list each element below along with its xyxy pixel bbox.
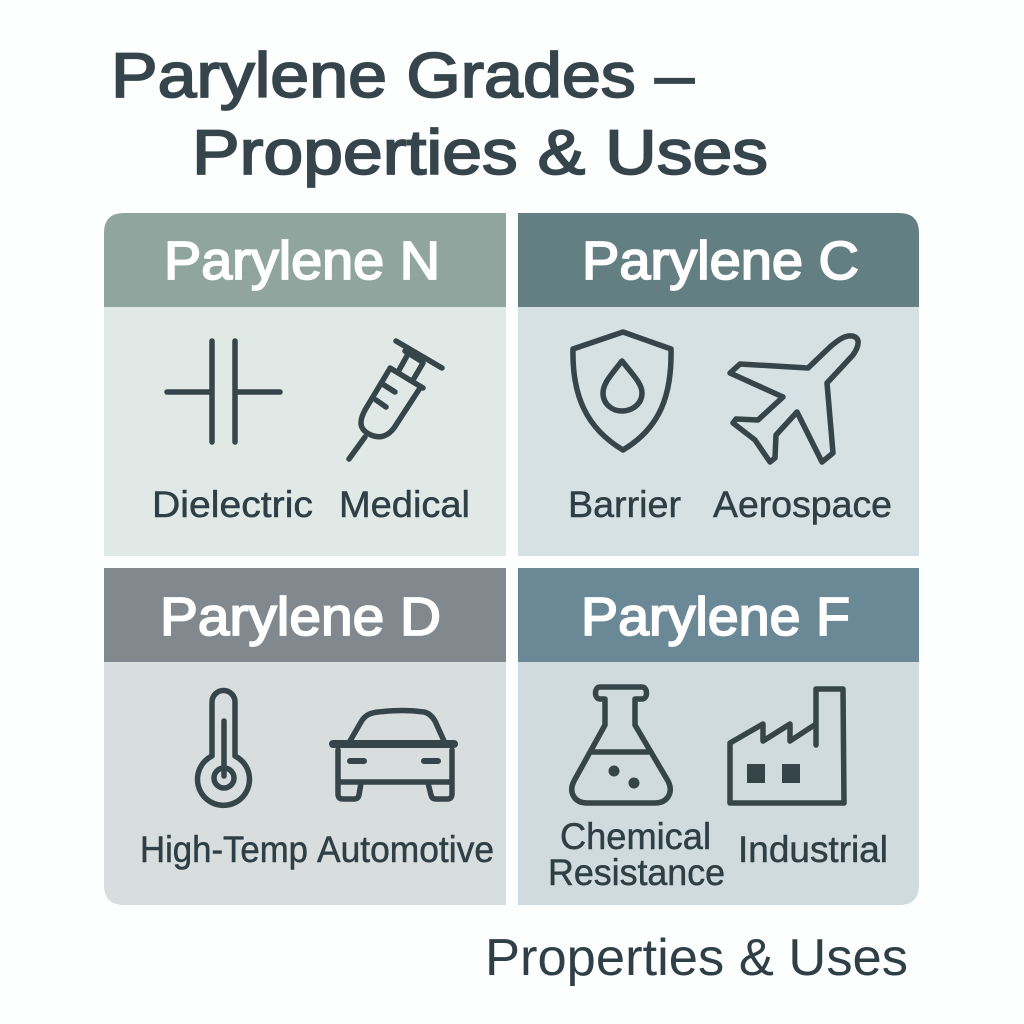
label: Chemical Resistance (548, 816, 725, 893)
label: Industrial: Industrial (738, 829, 888, 870)
panel body D (104, 662, 506, 905)
title (111, 41, 768, 188)
icon: factory (730, 689, 844, 803)
icon: capacitor (167, 341, 280, 442)
header: Parylene D (104, 568, 506, 662)
title: Properties & Uses (192, 118, 768, 188)
label: Medical: Medical (339, 484, 470, 525)
label: High-Temp: High-Temp (140, 829, 308, 870)
header: Parylene N: Parylene N (164, 231, 440, 291)
panel: Parylene C (518, 213, 919, 556)
label: Chemical Resistance: Resistance (548, 852, 725, 893)
icon: car (333, 710, 454, 799)
header: Parylene F (518, 568, 919, 662)
header: Parylene F: Parylene F (581, 587, 850, 647)
label: Chemical Resistance: Chemical (560, 816, 711, 857)
header: Parylene C: Parylene C (582, 231, 859, 291)
header: Parylene D: Parylene D (160, 587, 441, 647)
footer caption: Properties & Uses (485, 929, 908, 987)
panel: Parylene F (518, 568, 919, 905)
icon: flask (572, 687, 670, 803)
panel body F (518, 662, 919, 905)
icon: airplane (730, 336, 858, 462)
panel body N (104, 307, 506, 556)
panel: Parylene D (104, 568, 506, 905)
panel body C (518, 307, 919, 556)
icon: shield with drop (573, 332, 671, 450)
icon: thermometer (198, 690, 250, 805)
title: Parylene Grades – (111, 41, 694, 111)
header: Parylene C (518, 213, 919, 307)
label: Automotive: Automotive (317, 829, 494, 870)
label: Dielectric: Dielectric (152, 484, 313, 525)
panel: Parylene N (104, 213, 506, 556)
header: Parylene N (104, 213, 506, 307)
icon: syringe (349, 341, 442, 459)
label: Barrier: Barrier (568, 484, 681, 525)
label: Aerospace: Aerospace (713, 484, 892, 525)
